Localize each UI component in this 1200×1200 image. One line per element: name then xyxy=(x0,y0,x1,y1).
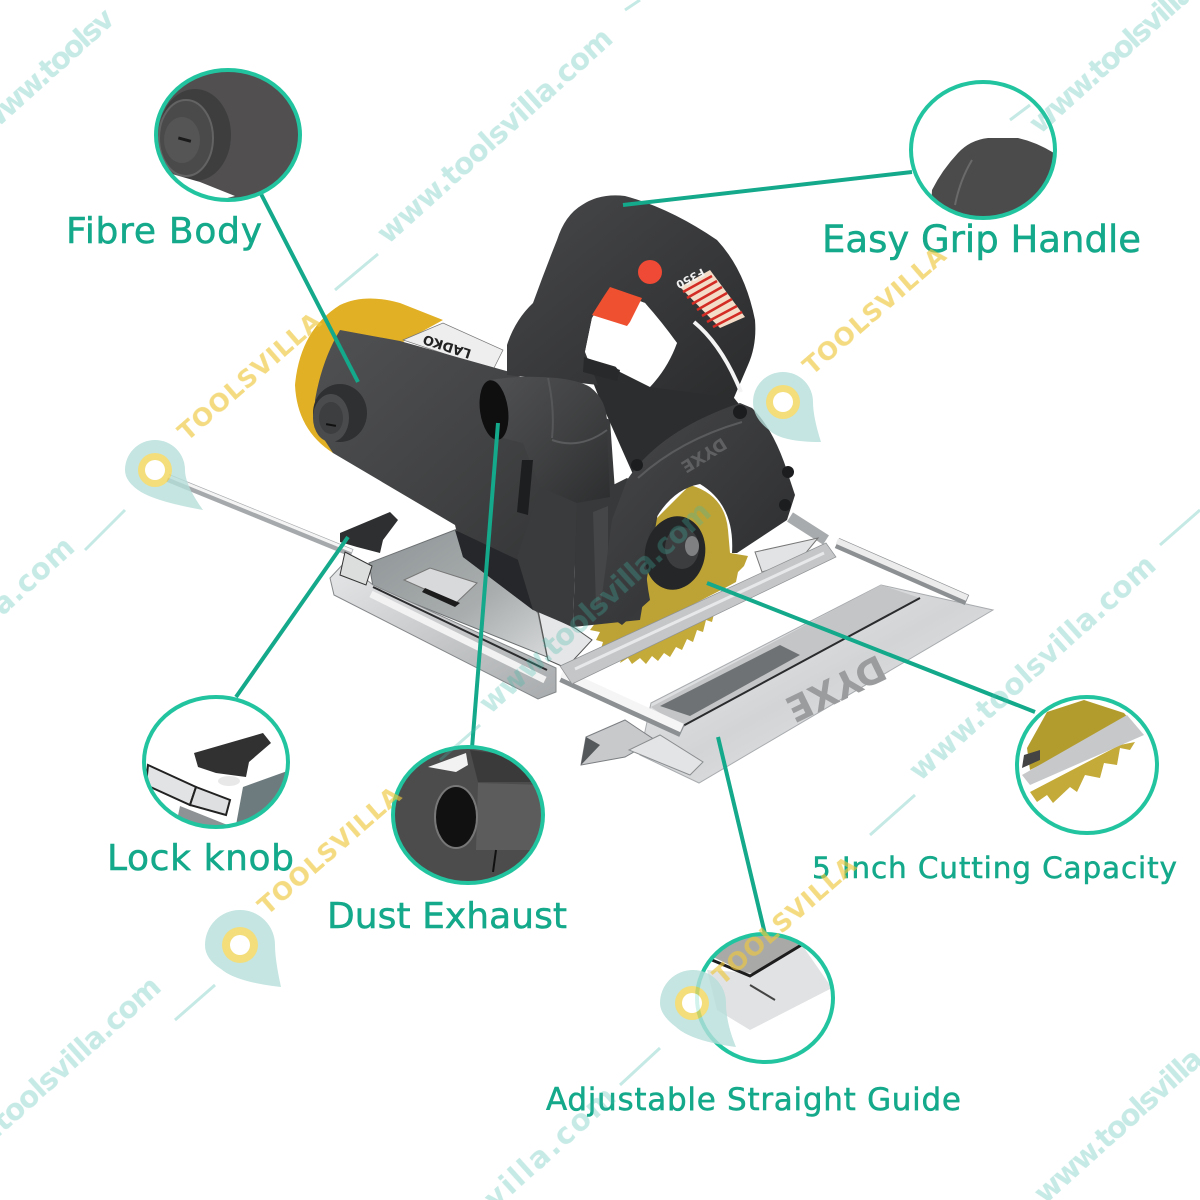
motor end knob xyxy=(313,384,367,442)
inset: handle xyxy=(932,138,1053,216)
callout: lock knob xyxy=(107,696,294,879)
watermark pattern: www.toolsvilla.com xyxy=(902,548,1162,787)
arbor nut xyxy=(638,511,712,595)
blade guard xyxy=(600,403,795,625)
inset: guide xyxy=(707,936,830,1030)
upper blade xyxy=(590,485,748,652)
blade guard: DYXE xyxy=(677,433,730,476)
callout lines xyxy=(236,172,1035,934)
label: Easy Grip Handle xyxy=(822,218,1141,261)
guide plate xyxy=(581,585,993,783)
watermark pattern: www.toolsvilla.com xyxy=(370,21,619,250)
inset: exhaust xyxy=(395,749,541,881)
lower blade teeth xyxy=(620,610,715,664)
callout: dust exhaust xyxy=(327,745,567,937)
nameplate: LADKO xyxy=(421,331,473,360)
base plate xyxy=(330,528,592,699)
speed badge: F350 xyxy=(673,265,707,291)
watermark pattern: TOOLSVILLA xyxy=(252,780,407,921)
dark rear body xyxy=(583,357,760,490)
watermark pattern: www.toolsvilla.com xyxy=(472,494,718,720)
watermark pattern: TOOLSVILLA xyxy=(707,850,862,991)
label: Lock knob xyxy=(107,838,294,879)
callout: fibre body xyxy=(66,65,310,252)
guide rods xyxy=(562,517,967,731)
nameplate xyxy=(403,323,503,370)
inset: fibre body xyxy=(158,72,298,198)
handle xyxy=(507,195,755,400)
callout: straight guide xyxy=(546,930,961,1118)
inset: blade teeth xyxy=(1022,700,1144,803)
cable strip xyxy=(694,322,741,392)
watermark pattern: TOOLSVILLA xyxy=(172,306,327,447)
label: Dust Exhaust xyxy=(327,896,567,937)
dust exhaust xyxy=(476,377,610,515)
callout: easy grip handle xyxy=(822,80,1141,261)
watermark pattern: TOOLSVILLA xyxy=(797,240,952,381)
yellow motor cap xyxy=(295,298,443,453)
mirrored plate logo: DYXE xyxy=(779,646,892,729)
trigger xyxy=(592,287,642,326)
label: 5 Inch Cutting Capacity xyxy=(812,851,1177,885)
label: Adjustable Straight Guide xyxy=(546,1082,961,1118)
product: mini cutter xyxy=(168,195,993,783)
front frame bar xyxy=(560,543,836,684)
inset: knob xyxy=(146,733,286,825)
gearbox side xyxy=(517,478,660,627)
motor body xyxy=(313,330,617,610)
hand opening xyxy=(585,290,677,387)
speed badge xyxy=(673,265,745,328)
red button xyxy=(638,260,662,284)
callout: cutting capacity xyxy=(812,696,1177,885)
long rod and lock knob xyxy=(168,476,398,553)
label: Fibre Body xyxy=(66,211,262,252)
